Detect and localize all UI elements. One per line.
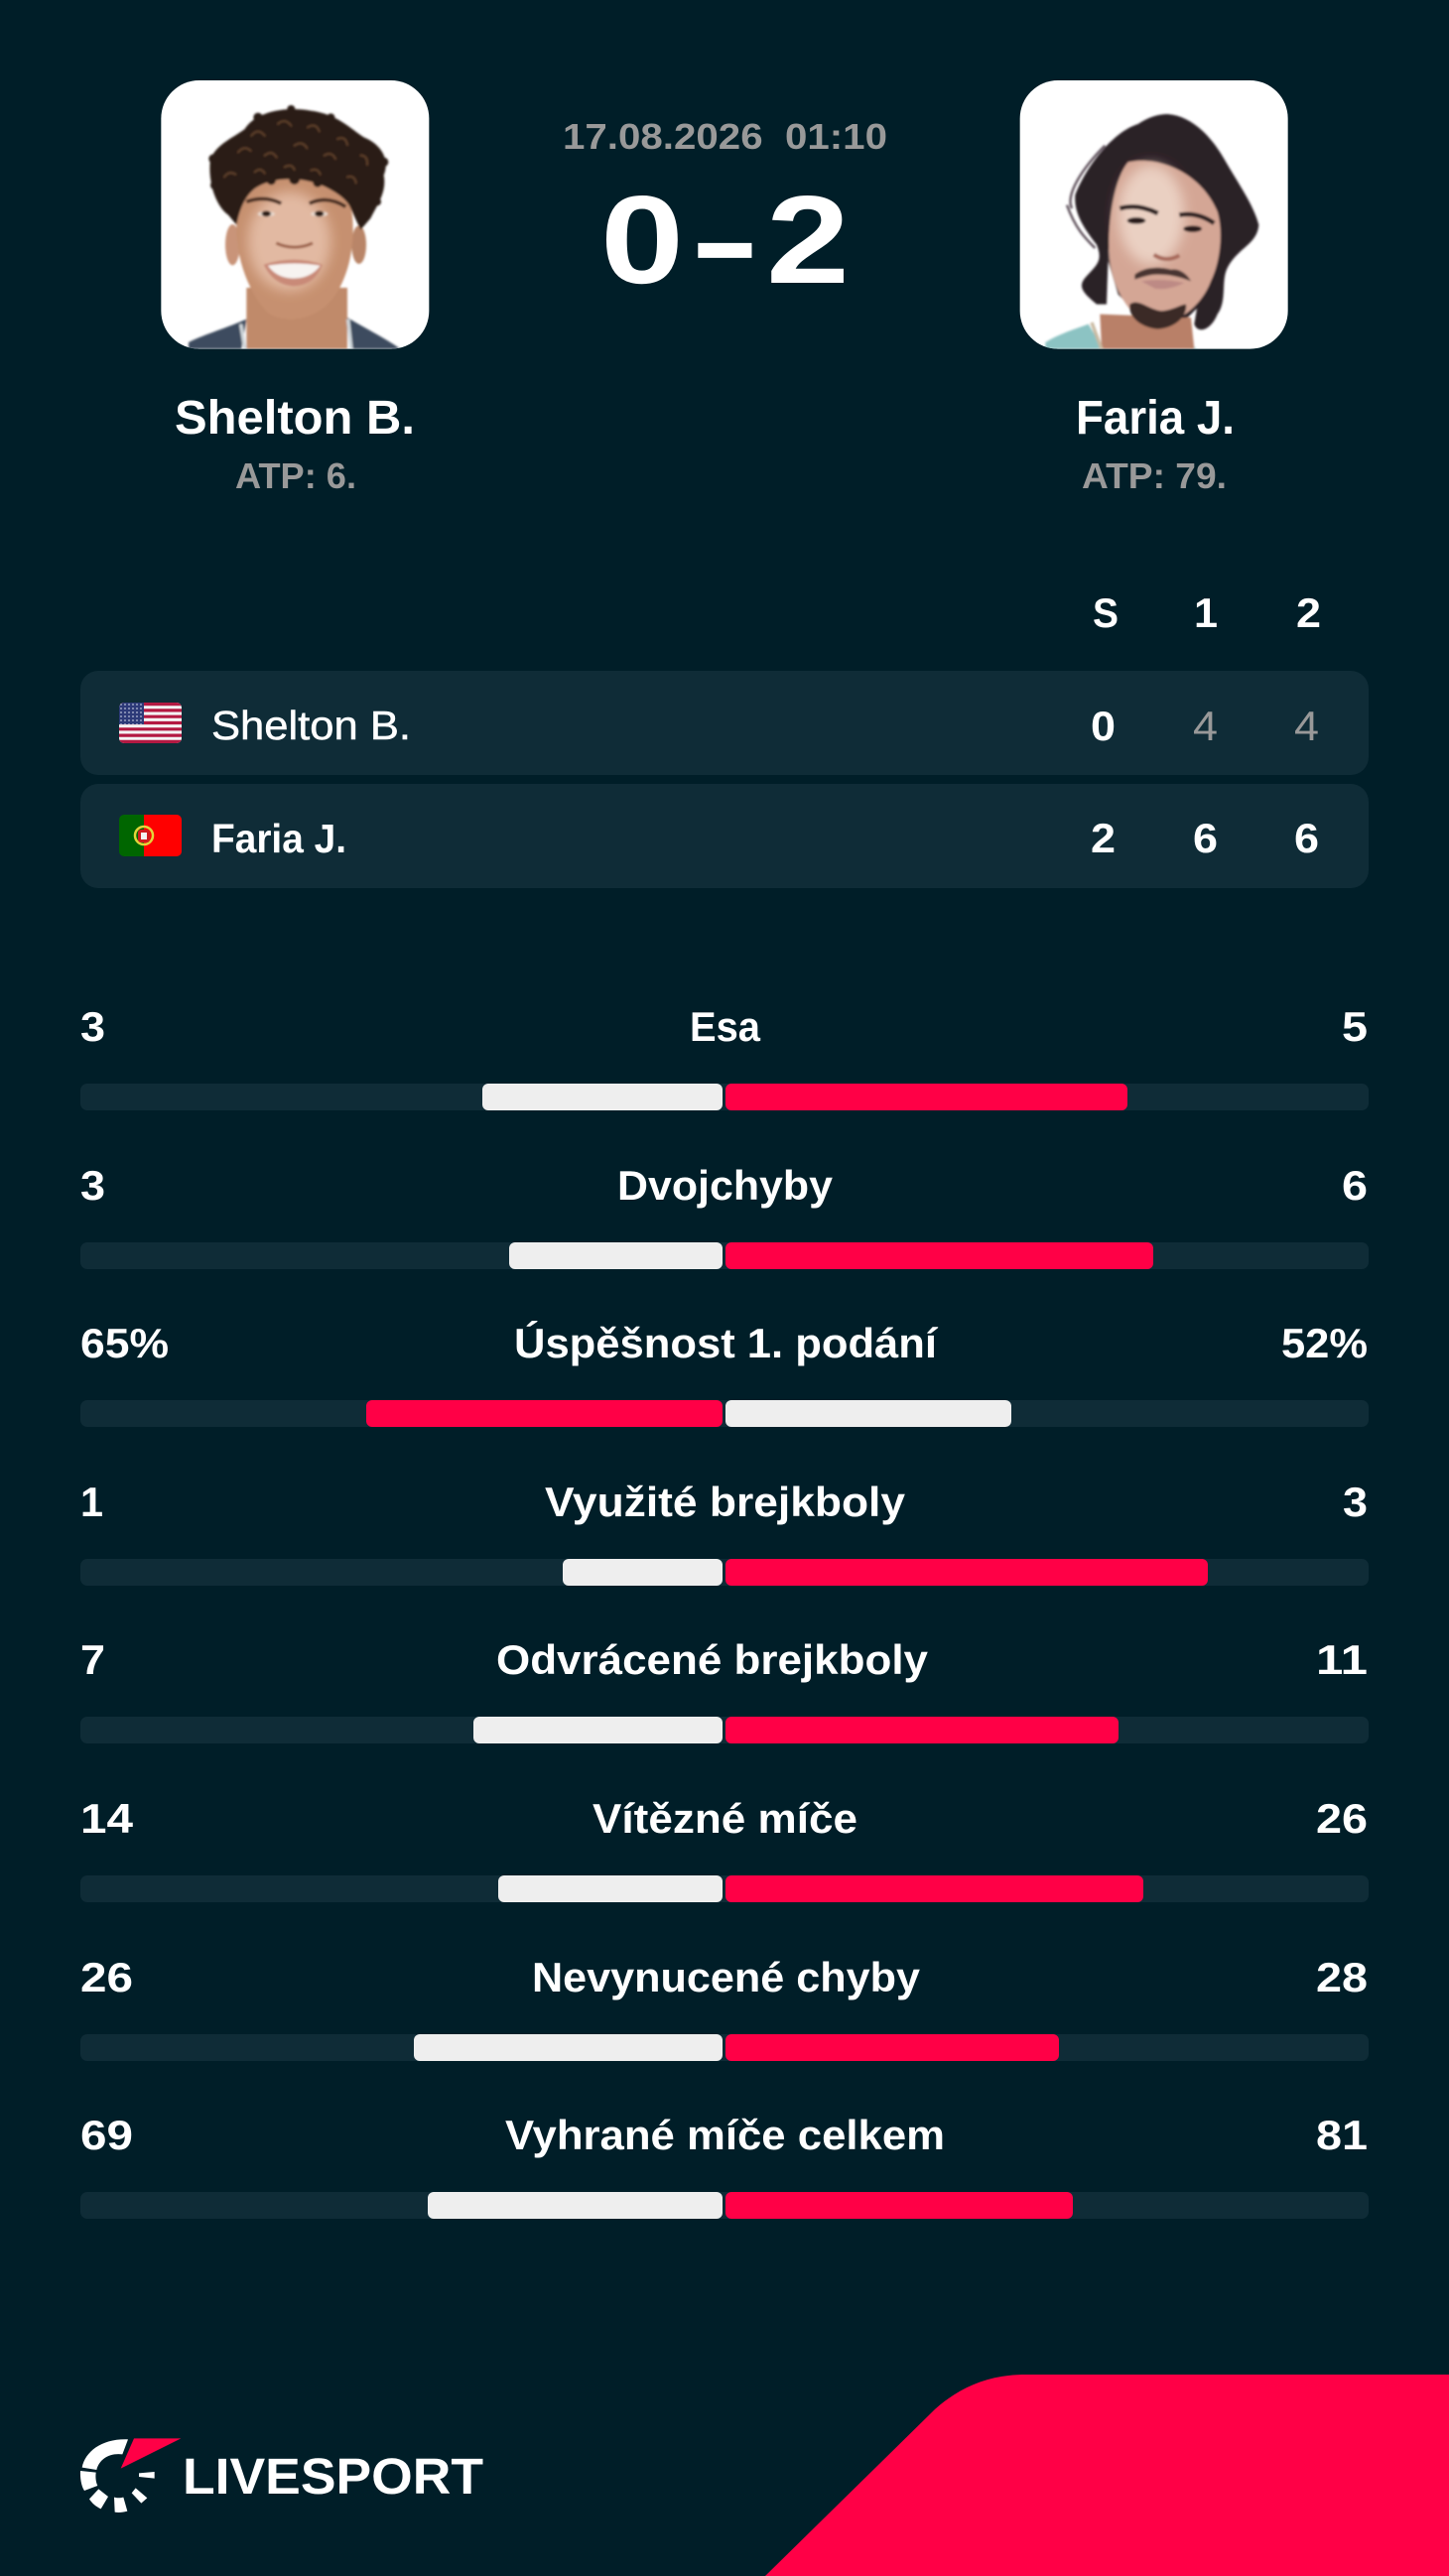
set scores: 0 bbox=[1091, 703, 1116, 749]
set scores bbox=[1091, 815, 1319, 861]
stat row: Vítězné míče: 14 bbox=[80, 1795, 134, 1842]
stat row: Úspěšnost 1. podání: 52% bbox=[1281, 1320, 1368, 1366]
stat row: Využité brejkboly: 1 bbox=[80, 1479, 103, 1525]
set scores bbox=[1091, 703, 1319, 749]
stat row: Esa bbox=[80, 1003, 1369, 1110]
stat row: Vyhrané míče celkem: 69 bbox=[80, 2112, 133, 2158]
final score: 2 bbox=[766, 170, 850, 310]
scoreboard row: Shelton B. bbox=[80, 671, 1369, 775]
stat row: Esa: 5 bbox=[1342, 1003, 1368, 1050]
stat row: Nevynucené chyby: 28 bbox=[1316, 1954, 1368, 2000]
flag: USA bbox=[119, 703, 182, 743]
stat row: Využité brejkboly bbox=[80, 1479, 1369, 1586]
stat row: Úspěšnost 1. podání: 65% bbox=[80, 1320, 169, 1366]
set scores: 4 bbox=[1294, 703, 1319, 749]
stat row: Vyhrané míče celkem bbox=[80, 2112, 1369, 2219]
stat row: Vítězné míče bbox=[80, 1795, 1369, 1902]
set scores: 6 bbox=[1193, 815, 1218, 861]
stat row: Využité brejkboly: Využité brejkboly bbox=[545, 1479, 906, 1525]
decorative red corner shape bbox=[765, 2375, 1449, 2576]
player photo: Faria J. bbox=[1020, 80, 1288, 349]
final score bbox=[600, 170, 850, 310]
set scores: 2 bbox=[1091, 815, 1116, 861]
player rank: Shelton B.: ATP: 6. bbox=[235, 455, 356, 496]
flag: Portugal bbox=[119, 815, 182, 856]
scoreboard row: Faria J. bbox=[80, 784, 1369, 888]
player photo: Shelton B. bbox=[161, 80, 429, 349]
stat row: Úspěšnost 1. podání: Úspěšnost 1. podání bbox=[514, 1319, 938, 1366]
stat row: Odvrácené brejkboly: 7 bbox=[80, 1636, 105, 1683]
stat row: Esa: 3 bbox=[80, 1003, 105, 1050]
stat row: Úspěšnost 1. podání bbox=[80, 1319, 1369, 1427]
stat row: Dvojchyby bbox=[80, 1162, 1369, 1269]
scoreboard column headers: 2 bbox=[1296, 589, 1321, 636]
stat row: Vítězné míče: Vítězné míče bbox=[593, 1795, 857, 1842]
stat row: Nevynucené chyby: 26 bbox=[80, 1954, 133, 2000]
stat row: Odvrácené brejkboly bbox=[80, 1636, 1369, 1743]
stat row: Nevynucené chyby bbox=[80, 1954, 1369, 2061]
stat row: Esa: Esa bbox=[690, 1003, 761, 1050]
stat row: Využité brejkboly: 3 bbox=[1343, 1479, 1368, 1525]
wordmark: LIVESPORT bbox=[183, 2448, 483, 2505]
scoreboard column headers bbox=[1093, 589, 1321, 636]
stat row: Vítězné míče: 26 bbox=[1316, 1795, 1368, 1842]
stat row: Odvrácené brejkboly: 11 bbox=[1316, 1636, 1368, 1683]
stat row: Dvojchyby: 6 bbox=[1342, 1162, 1368, 1209]
stat row: Nevynucené chyby: Nevynucené chyby bbox=[532, 1954, 921, 2000]
set scores: 6 bbox=[1294, 815, 1319, 861]
stat row: Dvojchyby: 3 bbox=[80, 1162, 105, 1209]
final score: 0 bbox=[600, 170, 684, 310]
set scores: 4 bbox=[1193, 703, 1218, 749]
player name: Faria J. bbox=[211, 816, 346, 861]
player name: Shelton B. bbox=[211, 703, 411, 748]
player name: Shelton B.: Shelton B. bbox=[175, 392, 415, 445]
stat row: Vyhrané míče celkem: Vyhrané míče celkem bbox=[505, 2112, 945, 2158]
stat row: Vyhrané míče celkem: 81 bbox=[1316, 2112, 1368, 2158]
player name: Faria J.: Faria J. bbox=[1076, 392, 1235, 445]
scoreboard column headers: S bbox=[1093, 589, 1119, 636]
match date and time: 17.08.2026 01:10 bbox=[563, 116, 887, 157]
scoreboard column headers: 1 bbox=[1194, 589, 1218, 636]
final score: - bbox=[690, 170, 760, 310]
logo: Livesport bbox=[80, 2438, 483, 2512]
stat row: Dvojchyby: Dvojchyby bbox=[617, 1162, 834, 1209]
stat row: Odvrácené brejkboly: Odvrácené brejkboly bbox=[496, 1636, 929, 1683]
icon: speedometer bbox=[80, 2438, 181, 2512]
player rank: Faria J.: ATP: 79. bbox=[1082, 455, 1227, 496]
